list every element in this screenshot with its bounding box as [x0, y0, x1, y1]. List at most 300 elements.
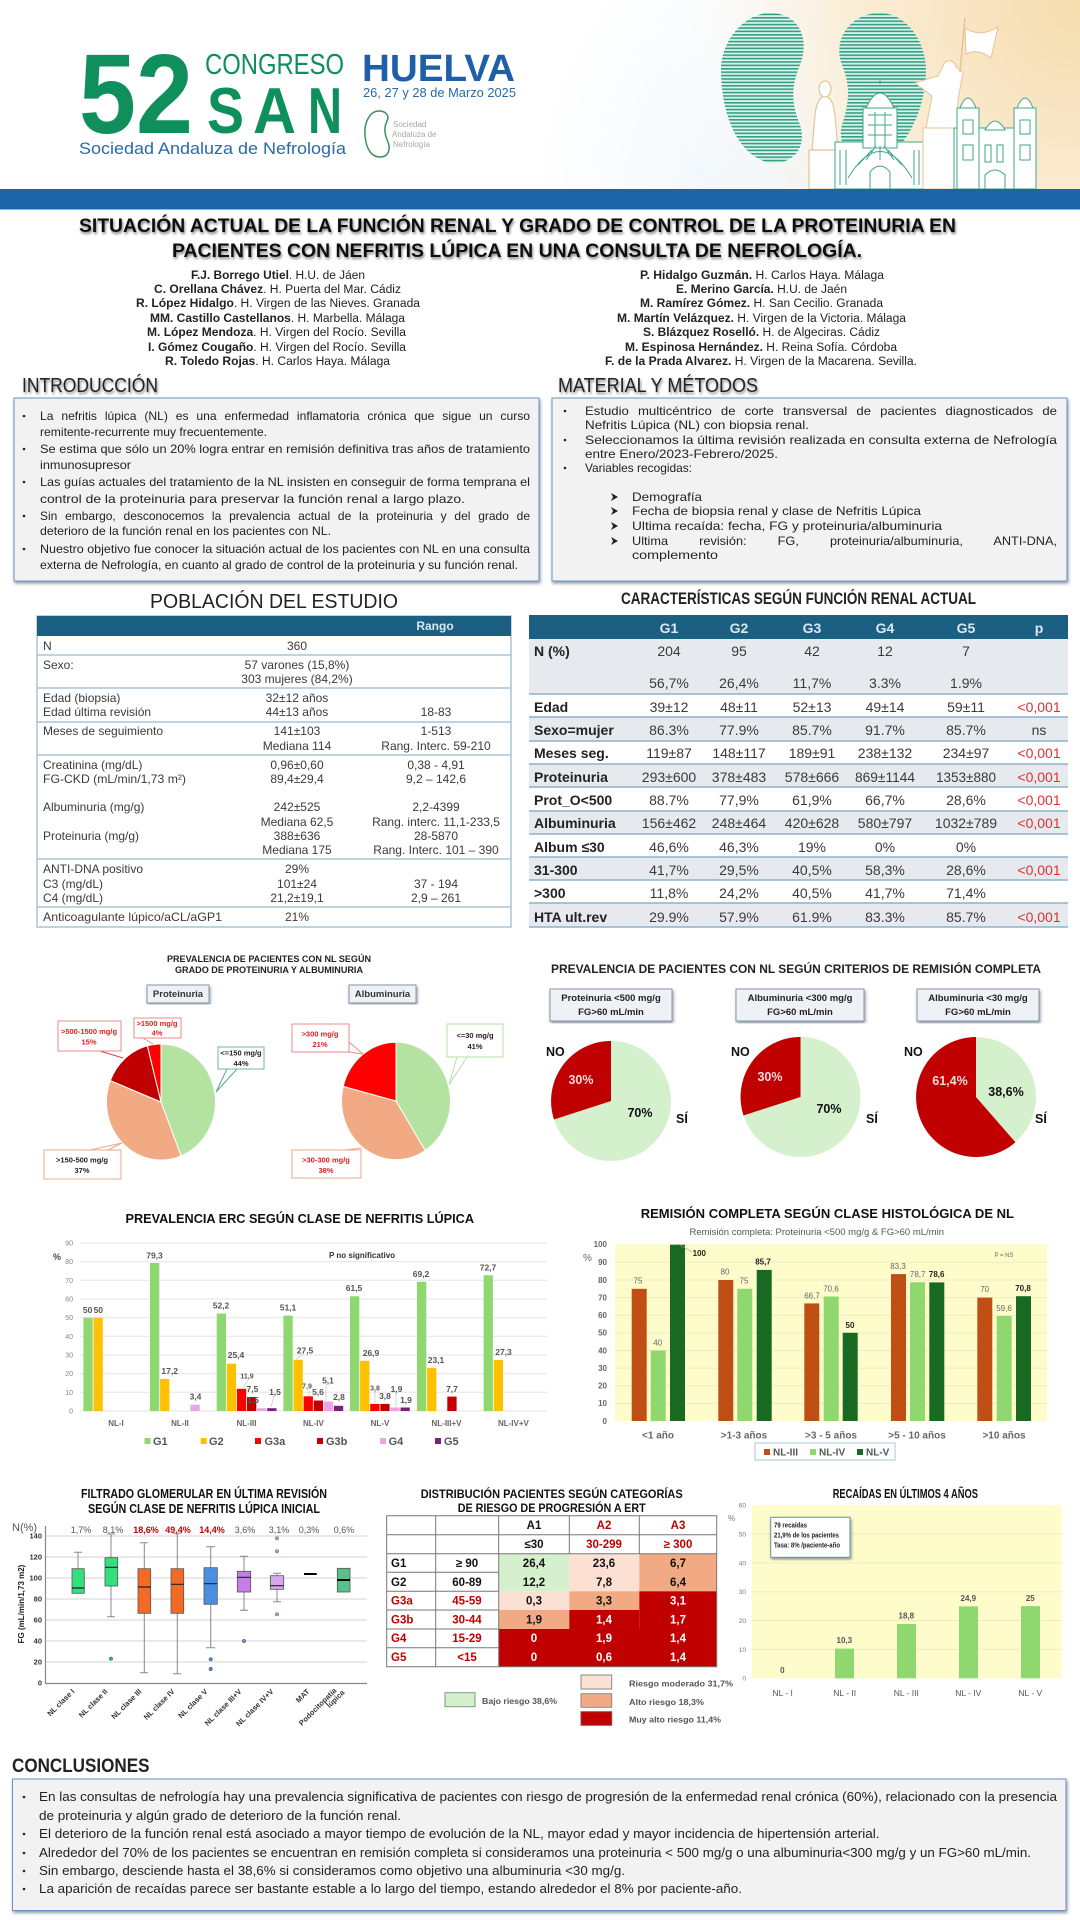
column G5: 28,6%: [946, 792, 986, 808]
authors right column: S. Blázquez Roselló. H. de Algeciras. Cádiz: [643, 327, 880, 339]
callout: <=150: 44%: [233, 1059, 249, 1068]
label box: albuminuria: [349, 985, 416, 1003]
column G2: 29,5%: [719, 862, 759, 878]
column G5: 28,6%: [946, 862, 986, 878]
range column values: 37 - 194: [414, 877, 458, 891]
column G2: 77.9%: [719, 722, 759, 738]
table: caracteristicas: G2: [730, 620, 749, 636]
range column values: 9,2 – 142,6: [406, 772, 466, 786]
callout: >500-1500: >500-1500 mg/g: [61, 1027, 117, 1036]
value labels: 5,1: [322, 1376, 334, 1386]
pie chart: remision proteinuria: [546, 1041, 688, 1161]
range column values: [372, 705, 500, 905]
value labels: 1,9: [391, 1384, 403, 1394]
row labels: Albuminuria (mg/g): [43, 800, 144, 814]
conclusions text: Sin embargo, desciende hasta el 38,6% si consideramos como objetivo una albuminuria <30 mg/g.: [39, 1864, 625, 1878]
value labels: 24,9: [961, 1594, 977, 1603]
middle column values: Mediana 114: [263, 739, 332, 753]
y axis: 0: [603, 1417, 608, 1426]
column G4: 83.3%: [865, 909, 905, 925]
bar chart: ERC por clase: P no significativo: [329, 1251, 395, 1260]
bars G1: [83, 1263, 493, 1411]
middle column values: 242±525: [274, 800, 321, 814]
callout: <=150: <=150 mg/g: [220, 1048, 262, 1058]
column G1: 156±462: [642, 815, 696, 831]
pie chart: remision proteinuria: SÍ: [676, 1111, 688, 1126]
y axis: 90: [598, 1258, 608, 1267]
authors right column: M. Ramírez Gómez. H. San Cecilio. Granada: [640, 298, 884, 310]
y axis: 30: [598, 1364, 608, 1373]
value labels: 66,7: [804, 1292, 820, 1301]
value labels: [634, 1262, 1012, 1348]
methods text: Seleccionamos la última revisión realizada en consulta externa de Nefrología: [585, 433, 1057, 447]
row labels: Anticoagulante lúpico/aCL/aGP1: [43, 910, 222, 924]
y axis: 20: [65, 1371, 73, 1378]
callout: <=30: [447, 1024, 503, 1085]
column G5: [935, 643, 997, 925]
column G2: 77,9%: [719, 792, 759, 808]
bars G3a: [237, 1389, 380, 1411]
row labels: Prot_O<500: [534, 792, 612, 808]
column G5: 85.7%: [946, 909, 986, 925]
column G1: 39±12: [650, 699, 689, 715]
x axis labels: Podocitopatía: [297, 1685, 339, 1727]
authors left column: C. Orellana Chávez . H. Puerta del Mar. Cádiz: [154, 284, 401, 296]
pie chart: remision proteinuria: 30%: [568, 1073, 594, 1087]
table: riesgo de progresion: 1,4: [670, 1633, 687, 1645]
column p: <0,001: [1017, 745, 1061, 761]
table: caracteristicas: G3: [803, 620, 822, 636]
table: riesgo de progresion: 7,8: [596, 1577, 613, 1589]
box plot: filtrado glomerular: 0,3%: [299, 1525, 319, 1535]
table: caracteristicas: p: [1035, 620, 1043, 636]
society logo text: Sociedad: [393, 120, 426, 129]
intro text: inmunosupresor: [40, 458, 131, 472]
y axis: 0: [38, 1678, 42, 1688]
table: riesgo de progresion: 30-44: [452, 1614, 482, 1626]
range column values: Rang. interc. 11,1-233,5: [372, 815, 500, 829]
bar chart: remision: P = NS: [994, 1253, 1014, 1259]
box plot: filtrado glomerular: 3,1%: [269, 1525, 289, 1535]
table: riesgo de progresion: G3b: [391, 1614, 413, 1626]
icon: statue: [809, 81, 842, 189]
value labels: 69,2: [413, 1269, 430, 1279]
value labels: 1,5: [269, 1387, 281, 1397]
value labels: 2,8: [333, 1392, 345, 1402]
city: HUELVA: [362, 48, 515, 90]
x axis labels: NL-I: [108, 1419, 124, 1428]
middle column values: 101±24: [277, 877, 317, 891]
row labels: [43, 639, 222, 924]
middle column values: Mediana 175: [262, 843, 332, 857]
table: riesgo de progresion: G5: [391, 1652, 407, 1664]
header cells: A1: [527, 1520, 542, 1532]
table: riesgo de progresion: 12,2: [523, 1577, 545, 1589]
column G2: 95: [731, 643, 747, 659]
table: caracteristicas: G4: [876, 620, 895, 636]
column G4: 238±132: [858, 745, 912, 761]
value labels: 80: [721, 1268, 730, 1277]
methods text: Estudio multicéntrico de corte transversal de pacientes diagnosticados de: [585, 404, 1057, 418]
intro text: deterioro de la función renal en los pacientes con NL.: [40, 524, 331, 538]
x axis labels: NL-II: [171, 1419, 189, 1428]
SAN word: A: [253, 74, 296, 147]
pie chart: remision albuminuria 300: NO: [731, 1045, 750, 1059]
value labels: 52,2: [213, 1301, 230, 1311]
table: riesgo de progresion: 0: [531, 1652, 537, 1664]
chart subtitle: Remisión completa: Proteinuria <500 mg/g & FG>60 mL/min: [690, 1227, 944, 1238]
pie chart: remision proteinuria: NO: [546, 1045, 565, 1059]
value labels: 25: [1026, 1594, 1035, 1603]
x axis labels: NL clase V: [176, 1687, 209, 1720]
column p: ns: [1032, 722, 1046, 738]
criterion box 3: Albuminuria <30 mg/g: [928, 993, 1028, 1004]
methods text: Nefritis Lúpica (NL) con biopsia renal.: [585, 418, 809, 432]
value labels: 27,3: [495, 1347, 512, 1357]
row labels: Edad última revisión: [43, 705, 151, 719]
row labels: >300: [534, 885, 566, 901]
box plot: filtrado glomerular: 49,4%: [165, 1525, 191, 1535]
intro text: remitente-recurrente muy frecuentemente.: [40, 425, 267, 439]
bars G5: [267, 1406, 410, 1411]
chart title: distribucion riesgo: DE RIESGO DE PROGRESIÓN A ERT: [458, 1500, 646, 1515]
authors right column: M. Espinosa Hernández. H. Reina Sofía. Córdoba: [625, 342, 898, 354]
bar chart: remision: 85,7: [755, 1258, 771, 1267]
value labels: 27,5: [297, 1346, 314, 1356]
middle column values: 0,96±0,60: [270, 758, 324, 772]
middle column values: [241, 639, 353, 924]
table: riesgo de progresion: 6,4: [670, 1577, 687, 1589]
heading: introduccion: INTRODUCCIÓN: [22, 374, 158, 397]
middle column values: 89,4±29,4: [270, 772, 324, 786]
intro text: control de la proteinuria para preservar la función renal a largo plazo.: [40, 492, 465, 506]
bars G3b: [247, 1397, 457, 1411]
legend: G5: [444, 1436, 459, 1448]
column G4: 869±1144: [855, 769, 915, 785]
authors left column: [136, 270, 421, 368]
bars NL-IV: [651, 1282, 1012, 1421]
variables list: Demografía: [632, 490, 702, 504]
bar chart: ERC por clase: %: [53, 1252, 61, 1262]
legend: G4: [389, 1436, 404, 1448]
x axis labels: NL clase IV: [142, 1687, 176, 1722]
intro text: [40, 409, 530, 572]
panel: material y metodos: [552, 398, 1067, 581]
column G1: 11,8%: [650, 885, 688, 901]
intro text: Nuestro objetivo fue conocer la situación actual de los pacientes con NL en una consulta: [40, 542, 530, 556]
row labels: Albuminuria: [534, 815, 616, 831]
pie chart: remision albuminuria 300: SÍ: [866, 1111, 878, 1126]
row labels: Creatinina (mg/dL): [43, 758, 142, 772]
legend: riesgo: Muy alto riesgo 11,4%: [629, 1714, 721, 1724]
header banner: [0, 0, 1080, 190]
y axis: 20: [739, 1618, 746, 1625]
pie chart: remision proteinuria: 70%: [627, 1106, 653, 1120]
criterion box 2: Albuminuria <300 mg/g: [748, 993, 853, 1004]
x axis labels: [108, 1419, 530, 1428]
y axis: 120: [29, 1552, 42, 1562]
callout: <=150: [216, 1047, 264, 1092]
value labels: 61,5: [346, 1283, 363, 1293]
value labels: 78,7: [910, 1270, 926, 1279]
column G2: 248±464: [712, 815, 766, 831]
callout: >30-300: 38%: [318, 1166, 334, 1175]
intro text: externa de Nefrología, en cuanto al grado de control de la proteinuria y su función renal.: [40, 558, 518, 572]
column p: <0,001: [1017, 792, 1061, 808]
y axis: 40: [65, 1334, 73, 1341]
variables list: [632, 490, 1057, 562]
column G4: 12: [877, 643, 893, 659]
table: riesgo de progresion: 1,4: [596, 1614, 613, 1626]
table: riesgo de progresion: G3a: [391, 1596, 413, 1608]
pie chart: remision albuminuria 30: NO: [904, 1045, 923, 1059]
column G5: 71,4%: [946, 885, 986, 901]
row bands: [529, 639, 1068, 927]
legend: NL-IV: [819, 1448, 845, 1458]
table grid: [387, 1516, 717, 1667]
table: riesgo de progresion: ≥ 300: [664, 1539, 692, 1551]
column G3: 189±91: [789, 745, 836, 761]
callout: recaidas: 79 recaídas: [774, 1522, 807, 1530]
y axis: 10: [598, 1399, 608, 1408]
icon: small kidney logo: [365, 111, 389, 157]
y axis: 70: [65, 1278, 73, 1285]
value labels: 5,6: [312, 1387, 324, 1397]
y axis: 0: [742, 1676, 746, 1682]
bars G4: [190, 1402, 400, 1411]
value labels: 23,1: [428, 1355, 445, 1365]
column G3: 85.7%: [792, 722, 832, 738]
methods text: [585, 404, 1057, 475]
medians: [72, 1567, 350, 1588]
table: riesgo de progresion: A3: [671, 1520, 685, 1532]
column p: <0,001: [1017, 699, 1061, 715]
legend: G2: [209, 1436, 224, 1448]
column G5: 85.7%: [946, 722, 986, 738]
authors left column: R. López Hidalgo . H. Virgen de las Nieves. Granada: [136, 298, 421, 310]
value labels: 3,4: [190, 1392, 202, 1402]
bar chart: remision: %: [583, 1253, 592, 1264]
criterion box 2: [736, 989, 864, 1021]
callout: >1500: 4%: [152, 1028, 163, 1038]
society name: Sociedad Andaluza de Nefrología: [79, 139, 347, 158]
legend: NL-V: [866, 1448, 890, 1458]
range column values: Rang. Interc. 59-210: [381, 739, 491, 753]
column G5: 1.9%: [950, 675, 982, 691]
middle column values: 32±12 años: [266, 691, 328, 705]
x axis labels: NL-III+V: [431, 1419, 462, 1428]
pie chart: remision albuminuria 30: SÍ: [1035, 1111, 1047, 1126]
column G2: 24,2%: [719, 885, 759, 901]
row labels: [534, 643, 616, 925]
table: riesgo de progresion: ≤30: [524, 1539, 544, 1551]
chart title: recaidas: RECAÍDAS EN ÚLTIMOS 4 AÑOS: [833, 1486, 978, 1501]
y axis: 50: [739, 1532, 746, 1538]
column G3: 61,9%: [792, 792, 832, 808]
column G1: 56,7%: [649, 675, 689, 691]
value labels: 75: [740, 1277, 749, 1286]
row labels: Proteinuria (mg/g): [43, 829, 139, 843]
title: [79, 213, 956, 262]
middle column values: 141±103: [274, 724, 321, 738]
bars NL-V: [670, 1245, 1031, 1421]
value labels: 75: [634, 1277, 643, 1286]
authors left column: F.J. Borrego Utiel . H.U. de Jáen: [191, 270, 365, 282]
table: riesgo de progresion: 0,3: [526, 1596, 542, 1608]
chart title: criterios remision: PREVALENCIA DE PACIENTES CON NL SEGÚN CRITERIOS DE REMISIÓN COMPLETA: [551, 963, 1041, 976]
icon: church: [835, 78, 923, 189]
column G4: 0%: [875, 839, 895, 855]
criterion box 3: FG>60 mL/min: [945, 1007, 1011, 1018]
row labels: Meses seg.: [534, 745, 609, 761]
x axis labels: NL-IV: [303, 1419, 325, 1428]
callout: >300: 21%: [312, 1040, 328, 1049]
y axis: 80: [65, 1259, 73, 1266]
label box: proteinuria: Proteinuria: [153, 989, 204, 1000]
row labels: C4 (mg/dL): [43, 891, 103, 905]
value labels: 11,9: [240, 1374, 254, 1380]
bar chart: remision: 50: [846, 1321, 855, 1330]
table: caracteristicas: [529, 615, 1068, 927]
callout: >150-500: [44, 1143, 122, 1179]
value labels: 40: [653, 1339, 663, 1348]
table: riesgo de progresion: 1,9: [596, 1633, 612, 1645]
value labels: [83, 1251, 512, 1405]
x axis labels: >3 - 5 años: [805, 1430, 857, 1442]
callout: >300: [292, 1024, 363, 1054]
y axis: 90: [65, 1240, 73, 1248]
criterion box 1: FG>60 mL/min: [578, 1007, 644, 1018]
value labels: 51,1: [280, 1303, 297, 1313]
bar chart: remision: [583, 1240, 1047, 1460]
x axis labels: NL-III: [236, 1419, 256, 1428]
bars G2: [94, 1318, 503, 1411]
legend: riesgo: Riesgo moderado 31,7%: [629, 1679, 733, 1689]
authors left column: MM. Castillo Castellanos . H. Marbella. Málaga: [150, 313, 406, 325]
chart title: prevalencia ERC: PREVALENCIA ERC SEGÚN CLASE DE NEFRITIS LÚPICA: [126, 1211, 475, 1226]
legend: [755, 1443, 895, 1460]
value labels: 17,2: [161, 1366, 178, 1376]
dates: 26, 27 y 28 de Marzo 2025: [363, 85, 516, 100]
value labels: 7,9: [302, 1384, 312, 1390]
legend: [144, 1436, 459, 1448]
table: riesgo de progresion: 1,9: [526, 1614, 542, 1626]
legend: NL-III: [773, 1448, 798, 1458]
society logo text: Nefrología: [393, 140, 430, 149]
table: riesgo de progresion: 0,6: [596, 1652, 612, 1664]
chart title: filtrado glomerular: [81, 1486, 327, 1516]
column G3: 40,5%: [792, 862, 832, 878]
title: SITUACIÓN ACTUAL DE LA FUNCIÓN RENAL Y GRADO DE CONTROL DE LA PROTEINURIA EN: [79, 213, 956, 237]
x axis labels: NL clase III: [109, 1687, 143, 1721]
chart title: distribucion riesgo: DISTRIBUCIÓN PACIENTES SEGÚN CATEGORÍAS: [421, 1486, 683, 1501]
bar chart: remision: 78,6: [929, 1270, 945, 1279]
conclusions text: Alrededor del 70% de los pacientes se encuentran en remisión completa si consideramos una proteinuria < 500 mg/g o una albuminuria<300 mg/g y un FG>60 mL/min.: [39, 1846, 1031, 1860]
value labels: 50: [94, 1305, 103, 1315]
criterion box 1: Proteinuria <500 mg/g: [561, 993, 661, 1004]
table: riesgo de progresion: 15-29: [452, 1633, 482, 1645]
box plot: filtrado glomerular: N(%): [12, 1522, 37, 1534]
pie chart: remision albuminuria 300: [731, 1037, 878, 1157]
boxes: [72, 1558, 350, 1613]
y axis: [65, 1240, 73, 1416]
range column values: 2,2-4399: [412, 800, 460, 814]
column G1: 46,6%: [649, 839, 689, 855]
column G5: 59±11: [947, 699, 985, 715]
table: riesgo de progresion: 1,4: [670, 1652, 687, 1664]
column p: <0,001: [1017, 815, 1061, 831]
column G1: 293±600: [642, 769, 696, 785]
table: riesgo de progresion: G2: [391, 1577, 406, 1589]
table: caracteristicas: G5: [957, 620, 976, 636]
bullets: [23, 1796, 25, 1890]
box plot: filtrado glomerular: [12, 1522, 367, 1728]
conclusions text: En las consultas de nefrología hay una prevalencia significativa de pacientes con riesgo de progresión de la enfermedad renal crónica (60%), relacionado con la presencia: [39, 1790, 1057, 1804]
column p: <0,001: [1017, 769, 1061, 785]
row labels: Meses de seguimiento: [43, 724, 163, 738]
heading: poblacion del estudio: POBLACIÓN DEL ESTUDIO: [150, 590, 398, 613]
pie chart: proteinuria: [106, 1044, 215, 1160]
chart title: distribucion riesgo: [421, 1486, 683, 1515]
title: PACIENTES CON NEFRITIS LÚPICA EN UNA CONSULTA DE NEFROLOGÍA.: [172, 238, 862, 262]
column p: <0,001: [1017, 909, 1061, 925]
column G4: [855, 643, 915, 925]
column G4: 91.7%: [865, 722, 905, 738]
column G4: 41,7%: [865, 885, 905, 901]
congress logo 52: 52: [79, 31, 193, 157]
x axis labels: NL-IV+V: [498, 1419, 530, 1428]
column G2: [712, 643, 766, 925]
methods text: Variables recogidas:: [585, 461, 692, 475]
column G4: 580±797: [858, 815, 912, 831]
x axis labels: MAT: [294, 1687, 312, 1705]
y axis: 50: [598, 1328, 608, 1338]
y axis: 60: [34, 1616, 42, 1624]
pie chart: albuminuria: [342, 1042, 450, 1160]
middle column values: 57 varones (15,8%): [245, 658, 349, 672]
row labels: Edad: [534, 699, 568, 715]
value labels: 18,8: [899, 1612, 915, 1620]
y axis: 80: [34, 1594, 42, 1604]
cell values: 26,4: [523, 1558, 546, 1570]
label box: albuminuria: Albuminuria: [355, 989, 411, 1000]
middle column values: 29%: [285, 862, 309, 876]
value labels: 0: [780, 1666, 785, 1675]
table: riesgo de progresion: [387, 1516, 717, 1667]
icon: cathedral: [954, 98, 1036, 189]
column G2: 48±11: [720, 699, 758, 715]
column G3: 61.9%: [792, 909, 832, 925]
y axis: 20: [34, 1658, 42, 1666]
congress word: CONGRESO: [205, 49, 344, 81]
column G2: 378±483: [712, 769, 766, 785]
range column values: 18-83: [421, 705, 452, 719]
icon: striped kidneys: [721, 13, 926, 163]
x axis labels: >1-3 años: [721, 1430, 768, 1442]
whiskers: [74, 1533, 281, 1674]
bar chart: ERC por clase: [53, 1240, 547, 1448]
row labels: Album ≤30: [534, 839, 605, 855]
x axis labels: NL - V: [1018, 1688, 1043, 1698]
callout: <=30: 41%: [467, 1042, 483, 1051]
chart title: prevalencia proteinuria albuminuria: [167, 953, 371, 976]
column G1: [642, 643, 696, 925]
range column values: Rang. Interc. 101 – 390: [373, 843, 499, 857]
row labels: FG-CKD (mL/min/1,73 m²): [43, 772, 186, 786]
value labels: 50: [83, 1305, 93, 1315]
value labels: 3,8: [370, 1386, 380, 1392]
percentages: 1,7%: [71, 1525, 91, 1535]
